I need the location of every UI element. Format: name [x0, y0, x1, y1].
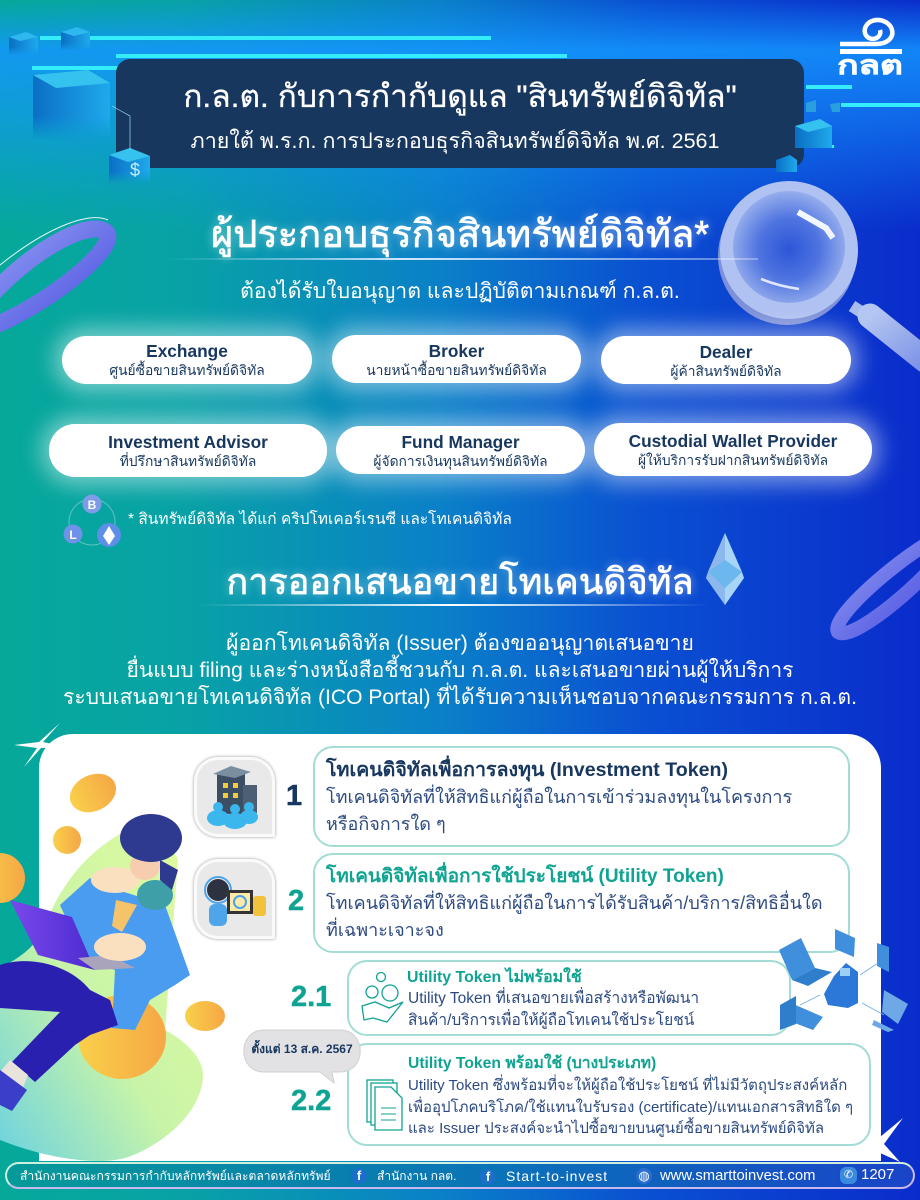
- card: Custodial Wallet Provider: [594, 423, 872, 476]
- item 1 text: [326, 784, 792, 834]
- title line 1: ก.ล.ต. กับการกำกับดูแล "สินทรัพย์ดิจิทัล": [183, 78, 737, 114]
- offering description: ระบบเสนอขายโทเคนดิจิทัล (ICO Portal) ที่ได้รับความเห็นชอบจากคณะกรรมการ ก.ล.ต.: [63, 686, 857, 709]
- logo: SEC: [837, 18, 903, 80]
- item 1 box: [313, 746, 850, 847]
- card: Fund Manager: Fund Manager: [401, 432, 520, 452]
- card: Exchange: [62, 336, 312, 384]
- item 2.1 text: สินค้า/บริการเพื่อให้ผู้ถือโทเคนใช้ประโยชน์: [408, 1012, 694, 1029]
- facebook SEC: [351, 1168, 456, 1184]
- icon: gears in hand: [361, 972, 404, 1023]
- illustration: computers network: [779, 929, 908, 1032]
- item 2.2 text: Utility Token ซึ่งพร้อมที่จะให้ผู้ถือใช้ประโยชน์ ที่ไม่มีวัตถุประสงค์หลัก: [408, 1077, 847, 1094]
- ring right: [830, 540, 920, 640]
- item 2.2 text: เพื่ออุปโภคบริโภค/ใช้แทนใบรับรอง (certificate)/แทนเอกสารสิทธิใด ๆ: [408, 1098, 853, 1116]
- item 2.2 text: [408, 1074, 853, 1137]
- footnote: * สินทรัพย์ดิจิทัล ได้แก่ คริปโทเคอร์เรนซี และโทเคนดิจิทัล: [128, 511, 512, 528]
- offering description: [63, 631, 857, 709]
- icon: crypto coins: [64, 494, 121, 547]
- card: Exchange: ศูนย์ซื้อขายสินทรัพย์ดิจิทัล: [109, 363, 265, 378]
- card: Custodial Wallet Provider: Custodial Wallet Provider: [629, 431, 837, 451]
- item 2.1 box: [347, 960, 791, 1036]
- facebook start-to-invest: Start-to-invest: [506, 1168, 608, 1184]
- item 2 icon: [194, 859, 275, 939]
- star sparkle top left: [14, 723, 60, 767]
- speech bubble: effective date: ตั้งแต่ 13 ส.ค. 2567: [251, 1042, 353, 1056]
- cube cluster right: [776, 100, 840, 172]
- facebook SEC: สำนักงาน กลต.: [377, 1169, 456, 1183]
- number 1: 1: [286, 780, 302, 812]
- ring left: [0, 217, 116, 332]
- card: Fund Manager: ผู้จัดการเงินทุนสินทรัพย์ดิจิทัล: [373, 454, 548, 469]
- licence subtitle: ต้องได้รับใบอนุญาต และปฏิบัติตามเกณฑ์ ก.ล.ต.: [240, 280, 680, 303]
- card: Dealer: Dealer: [700, 342, 752, 362]
- heading: token offering: การออกเสนอขายโทเคนดิจิทัล: [226, 561, 694, 602]
- item 2 heading: โทเคนดิจิทัลเพื่อการใช้ประโยชน์ (Utility Token): [326, 866, 724, 887]
- card: Broker: [332, 335, 581, 383]
- number 2: 2: [288, 885, 304, 917]
- number 2.1: 2.1: [291, 981, 331, 1013]
- item 2.2 heading: Utility Token พร้อมใช้ (บางประเภท): [408, 1055, 656, 1072]
- item 2.1 text: Utility Token ที่เสนอขายเพื่อสร้างหรือพัฒนา: [408, 990, 699, 1007]
- card: Broker: นายหน้าซื้อขายสินทรัพย์ดิจิทัล: [366, 363, 547, 378]
- card: Dealer: ผู้ค้าสินทรัพย์ดิจิทัล: [670, 364, 782, 379]
- item 2 box: [313, 853, 850, 953]
- item 2.1 heading: Utility Token ไม่พร้อมใช้: [407, 969, 582, 986]
- title line 2: ภายใต้ พ.ร.ก. การประกอบธุรกิจสินทรัพย์ดิจิทัล พ.ศ. 2561: [191, 129, 719, 153]
- item 2.1 text: [408, 987, 699, 1029]
- heading: digital asset operators: ผู้ประกอบธุรกิจสินทรัพย์ดิจิทัล*: [211, 214, 709, 256]
- website: www.smarttoinvest.com: [660, 1168, 815, 1184]
- star sparkle bottom right: [881, 1118, 903, 1162]
- hotline: 1207: [861, 1166, 894, 1183]
- facebook start-to-invest: f: [486, 1169, 490, 1184]
- offering description: ยื่นแบบ filing และร่างหนังสือชี้ชวนกับ ก.ล.ต. และเสนอขายผ่านผู้ให้บริการ: [126, 659, 794, 682]
- card: Investment Advisor: ที่ปรึกษาสินทรัพย์ดิจิทัล: [120, 454, 256, 469]
- card: Investment Advisor: [49, 424, 327, 477]
- item 1 heading: โทเคนดิจิทัลเพื่อการลงทุน (Investment Token): [326, 759, 728, 781]
- card: Custodial Wallet Provider: ผู้ให้บริการรับฝากสินทรัพย์ดิจิทัล: [638, 453, 828, 468]
- card: Fund Manager: [336, 426, 585, 474]
- card: Dealer: [601, 336, 851, 384]
- item 2 text: โทเคนดิจิทัลที่ให้สิทธิแก่ผู้ถือในการได้รับสินค้า/บริการ/สิทธิอื่นใด: [326, 893, 823, 913]
- icon: documents: [366, 1079, 403, 1131]
- item 1 icon: [194, 757, 275, 837]
- website: ◍: [638, 1168, 650, 1183]
- heading rule: [198, 604, 708, 606]
- speech bubble: effective date: [243, 1030, 361, 1084]
- card: Investment Advisor: Investment Advisor: [108, 432, 268, 452]
- magnifying glass: [718, 181, 920, 372]
- item 2.2 text: และ Issuer ประสงค์จะนำไปซื้อขายบนศูนย์ซื้อขายสินทรัพย์ดิจิทัล: [408, 1120, 824, 1137]
- offering description: ผู้ออกโทเคนดิจิทัล (Issuer) ต้องขออนุญาตเสนอขาย: [226, 632, 694, 655]
- item 1 text: โทเคนดิจิทัลที่ให้สิทธิแก่ผู้ถือในการเข้าร่วมลงทุนในโครงการ: [326, 787, 792, 807]
- illustration: person with laptop on coin: [0, 774, 225, 1161]
- facebook SEC: f: [357, 1168, 361, 1183]
- card: Exchange: Exchange: [146, 341, 228, 361]
- item 2 text: ที่เฉพาะเจาะจง: [326, 920, 444, 940]
- card: Broker: Broker: [429, 341, 484, 361]
- organisation name: สำนักงานคณะกรรมการกำกับหลักทรัพย์และตลาดหลักทรัพย์: [20, 1169, 331, 1183]
- cube cluster left: [9, 27, 150, 182]
- white panel: token types: [39, 734, 881, 1161]
- heading rule: [168, 258, 758, 260]
- footer bar: [5, 1162, 915, 1189]
- number 2.2: 2.2: [291, 1085, 331, 1117]
- hotline: [840, 1166, 894, 1184]
- title banner: [116, 59, 804, 168]
- icon: ethereum crystal: [706, 533, 744, 605]
- icon: crypto coins: B: [88, 498, 97, 512]
- icon: crypto coins: L: [69, 528, 77, 542]
- item 2 text: [326, 890, 823, 940]
- item 2.2 box: [347, 1043, 871, 1146]
- item 1 text: หรือกิจการใด ๆ: [326, 814, 446, 834]
- hotline: ✆: [844, 1169, 853, 1181]
- logo: SEC: กลต: [837, 50, 903, 80]
- cube cluster left: $: [130, 160, 140, 180]
